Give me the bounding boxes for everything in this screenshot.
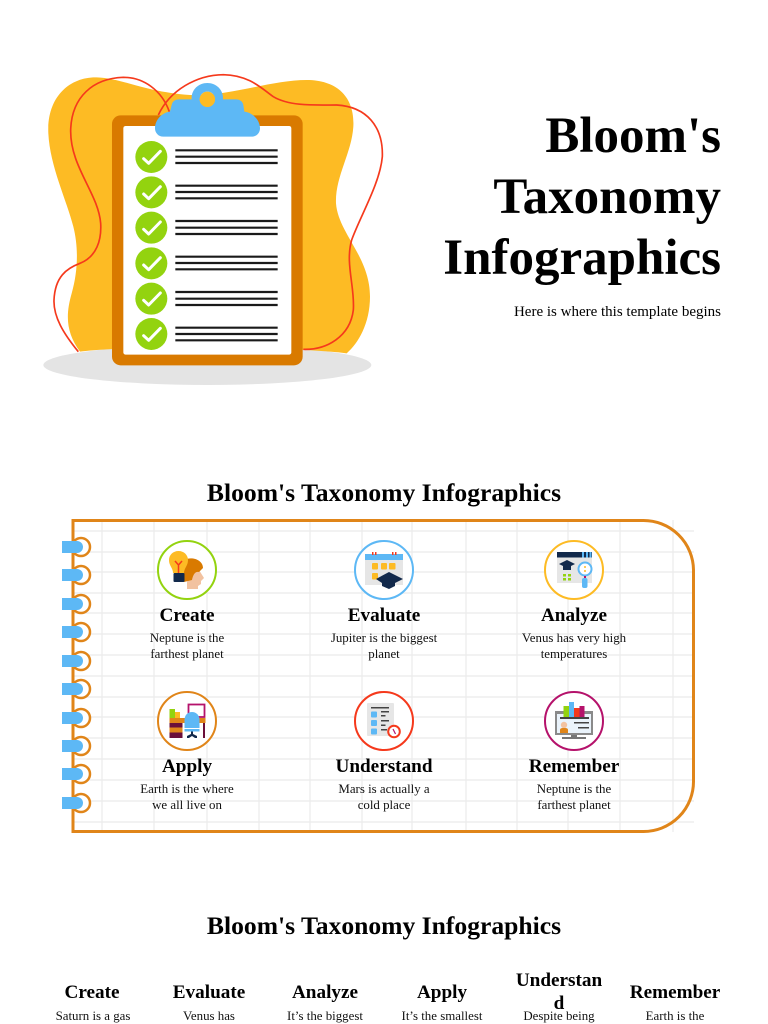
column: remember (630, 982, 721, 1023)
description: farthest planet (537, 798, 611, 812)
panel: notebook (62, 520, 694, 832)
label: Evaluate (348, 605, 421, 626)
label: Understand (335, 756, 433, 777)
description: Venus has very high (522, 631, 627, 645)
item: create (150, 541, 225, 661)
column: apply: It’s the smallest (402, 1009, 483, 1023)
columns row (56, 970, 721, 1023)
column: understand: d (554, 993, 565, 1014)
column: understand (516, 970, 603, 1023)
main title: Bloom's (545, 108, 721, 164)
description (331, 631, 438, 661)
label: Analyze (541, 605, 608, 626)
icon: calendar and cap (355, 541, 413, 599)
column: analyze: It’s the biggest (287, 1009, 363, 1023)
column: apply (402, 982, 483, 1023)
description: cold place (358, 798, 411, 812)
red outline curve (54, 75, 382, 352)
description: we all live on (152, 798, 222, 812)
column: apply: Apply (417, 982, 467, 1003)
column: remember: Remember (630, 982, 721, 1003)
item: analyze (522, 541, 627, 661)
column: analyze (287, 982, 363, 1023)
column: evaluate: Venus has (183, 1009, 235, 1023)
description (522, 631, 627, 661)
column: analyze: Analyze (292, 982, 359, 1003)
section heading 2: Bloom's Taxonomy Infographics (207, 911, 561, 940)
checklist rows (135, 141, 278, 350)
description (338, 782, 430, 812)
icon: monitor and chart (545, 692, 603, 750)
main title: Taxonomy (493, 169, 721, 225)
yellow blob (48, 77, 370, 353)
clipboard board (112, 115, 303, 365)
label: Apply (162, 756, 212, 777)
main title: Infographics (443, 230, 721, 286)
item: apply (140, 692, 234, 812)
description: planet (368, 647, 400, 661)
subtitle: Here is where this template begins (514, 304, 721, 320)
column: understand: Despite being (523, 1009, 595, 1023)
item: evaluate (331, 541, 438, 661)
spiral rings (62, 538, 90, 812)
description (150, 631, 225, 661)
description: temperatures (541, 647, 607, 661)
label: Create (159, 605, 215, 626)
description: Neptune is the (150, 631, 225, 645)
icon: magnifier and window (545, 541, 603, 599)
description (537, 782, 612, 812)
icon: lightbulb and head (158, 541, 216, 599)
column: remember: Earth is the (646, 1009, 705, 1023)
clipboard clip (155, 83, 260, 137)
notebook border (73, 520, 694, 832)
column: create (56, 982, 130, 1023)
item: remember (529, 692, 620, 812)
icon: desk and chair (158, 692, 216, 750)
column: create: Create (64, 982, 120, 1003)
notebook grid (73, 520, 694, 832)
main title (443, 108, 721, 286)
column: understand: Understan (516, 970, 603, 991)
column: evaluate: Evaluate (173, 982, 246, 1003)
shadow ellipse (43, 345, 371, 385)
column: create: Saturn is a gas (56, 1009, 130, 1023)
description (140, 782, 234, 812)
description: Jupiter is the biggest (331, 631, 438, 645)
label: Remember (529, 756, 620, 777)
clipboard paper (123, 126, 291, 355)
item: understand (335, 692, 433, 812)
illustration: clipboard checklist (43, 75, 382, 385)
description: Neptune is the (537, 782, 612, 796)
description: farthest planet (150, 647, 224, 661)
description: Earth is the where (140, 782, 234, 796)
column: evaluate (173, 982, 246, 1023)
description: Mars is actually a (338, 782, 430, 796)
icon: document and clock (355, 692, 413, 750)
section heading 1: Bloom's Taxonomy Infographics (207, 478, 561, 507)
